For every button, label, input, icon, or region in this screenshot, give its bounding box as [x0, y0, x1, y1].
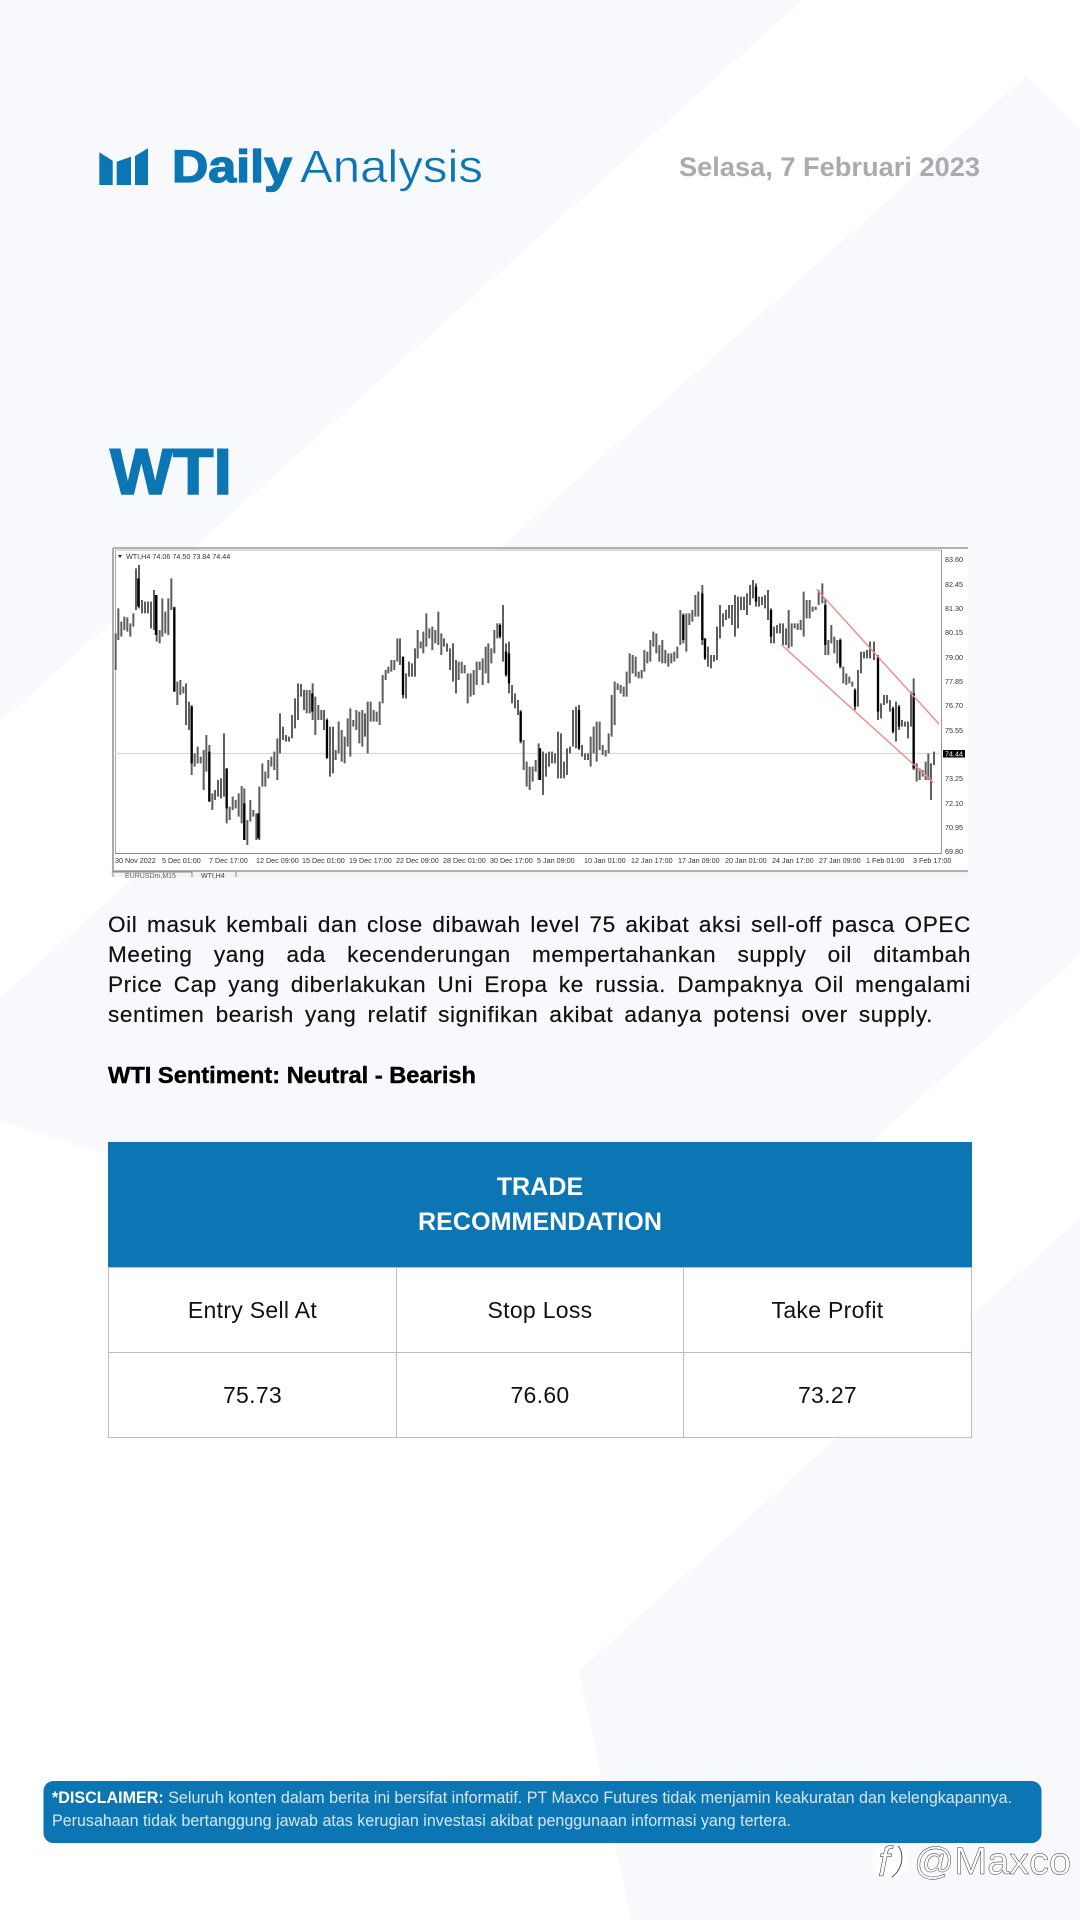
price axis labels: 74.44 [945, 750, 963, 758]
table header: TRADE [497, 1173, 583, 1201]
price axis labels: 73.25 [945, 774, 963, 783]
date axis labels: 12 Jan 17:00 [631, 856, 673, 865]
date axis labels: 10 Jan 01:00 [584, 856, 626, 865]
price axis labels: 77.85 [945, 677, 963, 686]
price axis labels: 79.00 [945, 653, 963, 662]
date axis labels: 5 Jan 09:00 [537, 856, 575, 865]
sentiment line: WTI Sentiment: Neutral - Bearish [108, 1062, 476, 1088]
value: entry sell [108, 1352, 397, 1438]
analysis paragraph: Meeting yang ada kecenderungan mempertahankan supply oil ditambah [108, 942, 971, 967]
date axis labels: 15 Dec 01:00 [302, 856, 345, 865]
logo wordmark: Analysis [300, 141, 483, 192]
date axis labels: 20 Jan 01:00 [725, 856, 767, 865]
title: WTI: WTI [110, 435, 232, 508]
table header [108, 1142, 972, 1267]
date axis labels: 24 Jan 17:00 [772, 856, 814, 865]
analysis paragraph [108, 912, 971, 1027]
price axis labels: 70.95 [945, 823, 963, 832]
date axis labels: 1 Feb 01:00 [866, 856, 904, 865]
disclaimer banner: Perusahaan tidak bertanggung jawab atas kerugian investasi akibat penggunaan informasi yang tertera. [52, 1812, 791, 1830]
date axis labels: 27 Jan 09:00 [819, 856, 861, 865]
candlestick chart: WTI H4 [110, 547, 968, 880]
column: entry sell [108, 1267, 397, 1353]
value: entry sell: 75.73 [223, 1382, 282, 1408]
analysis paragraph: Oil masuk kembali dan close dibawah level 75 akibat aksi sell-off pasca OPEC [108, 912, 971, 937]
candles: January and February section [540, 580, 934, 800]
date axis labels: 30 Nov 2022 [115, 856, 156, 865]
watermark: @Maxco: f [878, 1838, 894, 1885]
price axis labels: 83.60 [945, 555, 963, 564]
price axis labels: 80.15 [945, 628, 963, 637]
chart tabs: EURUSDm,M15 [125, 873, 176, 880]
analysis paragraph: sentimen bearish yang relatif signifikan akibat adanya potensi over supply. [108, 1002, 933, 1027]
value: take profit: 73.27 [798, 1382, 857, 1408]
date axis labels: 19 Dec 17:00 [349, 856, 392, 865]
column: stop loss [396, 1267, 684, 1353]
value: take profit [683, 1352, 972, 1438]
price axis labels [943, 555, 965, 856]
column: entry sell: Entry Sell At [188, 1297, 317, 1323]
disclaimer banner: *DISCLAIMER: Seluruh konten dalam berita ini bersifat informatif. PT Maxco Futures tidak menjamin keakuratan dan kelengkapannya. [52, 1789, 1012, 1807]
logo wordmark [172, 141, 483, 192]
date axis labels: 7 Dec 17:00 [209, 856, 248, 865]
price axis labels: 69.80 [945, 847, 963, 856]
value: stop loss [396, 1352, 684, 1438]
price axis labels: 82.45 [945, 580, 963, 589]
red trend channel lines [782, 589, 939, 782]
candles: December section [116, 565, 539, 845]
date axis labels: 3 Feb 17:00 [913, 856, 951, 865]
icon: bar chart logo mark [99, 148, 148, 185]
table header: RECOMMENDATION [418, 1208, 662, 1236]
date axis labels [115, 856, 951, 865]
price axis labels: 75.55 [945, 726, 963, 735]
chart tabs [113, 872, 236, 880]
date: Selasa, 7 Februari 2023 [679, 152, 980, 182]
chart frame [110, 548, 968, 877]
price axis labels: 81.30 [945, 604, 963, 613]
chart symbol info: WTI,H4 74.06 74.50 73.84 74.44 [126, 552, 230, 561]
date axis labels: 17 Jan 09:00 [678, 856, 720, 865]
column: take profit [683, 1267, 972, 1353]
date axis labels: 28 Dec 01:00 [443, 856, 486, 865]
watermark: @Maxco: @Maxco [914, 1841, 1071, 1883]
column: take profit: Take Profit [772, 1297, 883, 1323]
logo wordmark: Daily [172, 141, 292, 192]
date axis labels: 30 Dec 17:00 [490, 856, 533, 865]
analysis paragraph: Price Cap yang diberlakukan Uni Eropa ke russia. Dampaknya Oil mengalami [108, 972, 971, 997]
price axis labels: 72.10 [945, 799, 963, 808]
date axis labels: 12 Dec 09:00 [256, 856, 299, 865]
chart tabs: WTI,H4 [201, 873, 225, 880]
column: stop loss: Stop Loss [488, 1297, 592, 1323]
price axis labels: 76.70 [945, 701, 963, 710]
value: stop loss: 76.60 [510, 1382, 570, 1408]
logo: Daily Analysis [99, 141, 483, 192]
date axis labels: 22 Dec 09:00 [396, 856, 439, 865]
trade recommendation table [108, 1142, 972, 1438]
date axis labels: 5 Dec 01:00 [162, 856, 201, 865]
